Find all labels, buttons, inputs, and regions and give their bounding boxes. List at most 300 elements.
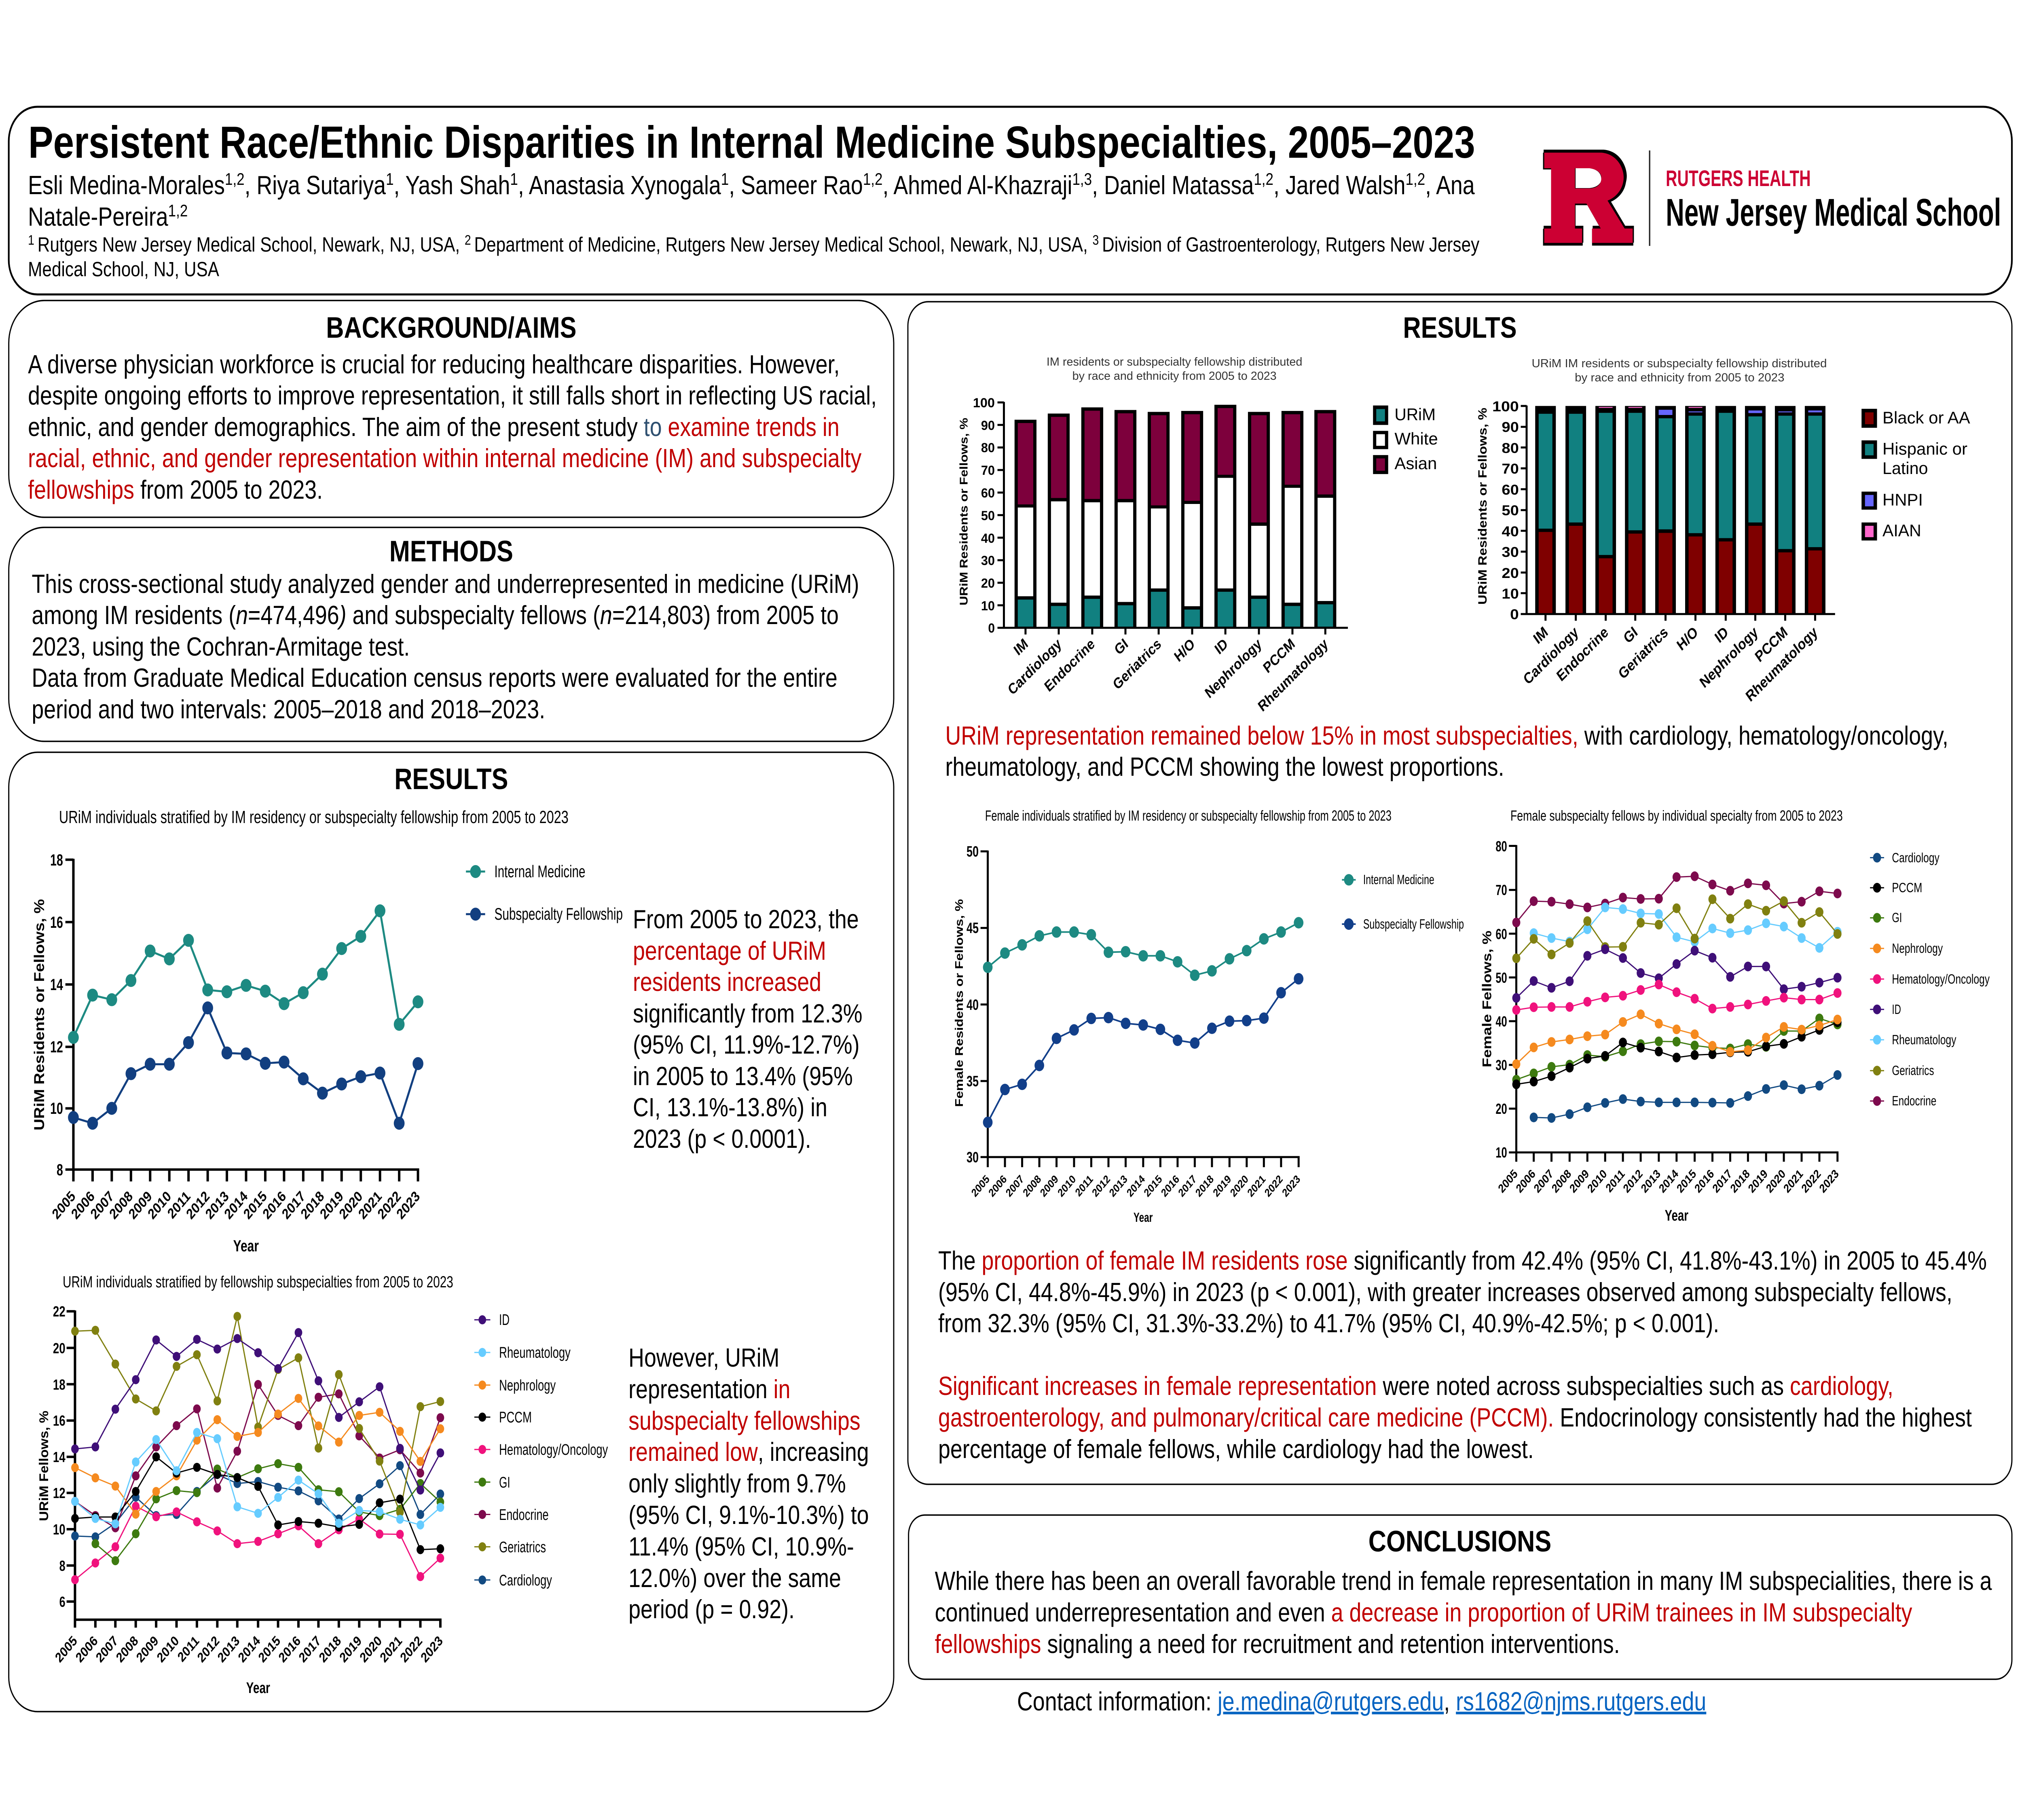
text: background	[28, 349, 877, 504]
legend labels: Hispanic or	[1882, 440, 1967, 459]
y axis labels: 10	[50, 1099, 63, 1117]
x axis labels: 2006	[73, 1633, 100, 1666]
x axis labels: 2016	[1159, 1173, 1181, 1200]
y axis labels	[50, 851, 63, 1179]
series: Cardiology	[1534, 1075, 1838, 1118]
authors: , Sameer Rao	[729, 170, 863, 200]
panel: methods	[9, 527, 894, 741]
x axis labels: 2018	[298, 1188, 327, 1223]
y axis title: URiM Residents or Fellows, %	[32, 899, 47, 1130]
affiliations: Division of Gastroenterology, Rutgers New Jersey	[1102, 233, 1480, 256]
legend labels: Subspecialty Fellowship	[495, 905, 623, 924]
bar: Rheumatology	[1314, 410, 1336, 628]
text: URiM residents finding: in 2005 to 13.4% (95%	[633, 1061, 853, 1091]
authors: 1	[386, 170, 394, 189]
series: Subspecialty Fellowship	[73, 1008, 418, 1123]
y axis labels: 12	[53, 1485, 66, 1502]
text: female representation findings: percentage of female fellows, while cardiology had the lowest.	[938, 1434, 1534, 1464]
text: female representation findings: Significant increases in female representation were noted across subspecialties such as cardiology,	[938, 1371, 1893, 1401]
text: subspecialty fellowship finding: subspecialty fellowships	[628, 1406, 861, 1435]
authors: , Jared Walsh	[1273, 170, 1406, 200]
bar: Nephrology	[1745, 406, 1766, 614]
title: Persistent Race/Ethnic Disparities in Internal Medicine Subspecialties, 2005–2023	[28, 117, 1475, 167]
series: Hematology/Oncology	[75, 1506, 440, 1580]
x axis labels: Geriatrics	[1110, 635, 1164, 693]
text: conclusions: continued underrepresentation and even a decrease in proportion of URiM trainees in IM subspecialty	[935, 1598, 1912, 1627]
x axis labels: 2017	[296, 1633, 323, 1666]
logo: Rutgers Health New Jersey Medical School: RUTGERS HEALTH	[1666, 165, 1810, 191]
x axis labels: 2012	[195, 1633, 222, 1666]
x axis labels: 2013	[1639, 1167, 1662, 1196]
y axis labels: 18	[53, 1377, 66, 1393]
series: Rheumatology	[1534, 908, 1838, 948]
bar: H/O	[1181, 411, 1203, 628]
bar: IM	[1535, 406, 1556, 614]
bar: Cardiology	[1048, 414, 1070, 628]
legend labels	[1363, 873, 1464, 932]
x axis labels: 2009	[1038, 1173, 1060, 1200]
x axis labels: 2010	[154, 1633, 182, 1666]
series: Nephrology	[1516, 1014, 1838, 1064]
text: URiM residents finding: From 2005 to 2023, the	[633, 904, 859, 934]
x axis labels: 2005	[53, 1633, 80, 1666]
y axis labels: 100	[1492, 398, 1519, 415]
authors: , Ahmed Al-Khazraji	[882, 170, 1072, 200]
panel: results right	[908, 302, 2012, 1484]
bar: ID	[1715, 406, 1736, 614]
y axis labels: 40	[1495, 1014, 1507, 1030]
y axis labels: 50	[981, 509, 995, 523]
y axis labels: 30	[981, 554, 995, 568]
text: female representation findings: gastroenterology, and pulmonary/critical care medicine (PCCM). Endocrinology consistently had the highest	[938, 1403, 1972, 1432]
x axis labels: 2005	[970, 1173, 992, 1200]
text: URiM residents finding: CI, 13.1%-13.8%) in	[633, 1092, 827, 1122]
x axis labels: 2009	[134, 1633, 161, 1666]
bar: Cardiology	[1565, 406, 1586, 614]
x axis labels: 2006	[987, 1173, 1009, 1200]
legend labels	[1394, 405, 1438, 473]
legend labels: Latino	[1882, 459, 1928, 478]
legend labels: Nephrology	[1892, 942, 1943, 956]
text: conclusions: fellowships signaling a need for recruitment and retention interventions.	[935, 1629, 1620, 1659]
chart title: URiM IM residents or subspecialty fellowship distributed	[1532, 357, 1827, 370]
x axis labels: 2020	[337, 1188, 365, 1223]
chart: IM residents and fellows by race and ethnicity	[958, 355, 1438, 715]
x axis labels: 2013	[203, 1188, 232, 1223]
x axis labels: 2014	[1656, 1166, 1681, 1196]
x axis title: Year	[246, 1679, 270, 1697]
x axis labels: 2006	[69, 1188, 97, 1223]
chart: female fellows by specialty	[1480, 808, 1990, 1224]
x axis labels: 2013	[1107, 1173, 1129, 1200]
x axis labels: 2021	[1246, 1173, 1268, 1200]
x axis labels: Rheumatology	[1743, 623, 1821, 705]
x axis labels: PCCM	[1752, 623, 1790, 666]
authors: 1,2	[863, 170, 882, 189]
legend labels: PCCM	[1892, 881, 1922, 895]
x axis labels: 2015	[241, 1188, 270, 1223]
series: Rheumatology	[75, 1433, 440, 1525]
text: methods: period and two intervals: 2005–2018 and 2018–2023.	[32, 694, 545, 724]
chart title: URiM individuals stratified by IM residency or subspecialty fellowship from 2005 to 2023	[59, 807, 569, 827]
y axis labels: 50	[1502, 502, 1519, 518]
y axis labels: 80	[1502, 440, 1519, 456]
x axis labels: 2012	[1621, 1167, 1645, 1196]
y axis labels: 60	[1502, 482, 1519, 498]
y axis labels: 90	[1502, 419, 1519, 435]
x axis labels: IM	[1531, 623, 1551, 648]
heading: results: RESULTS	[394, 763, 508, 796]
chart title: by race and ethnicity from 2005 to 2023	[1575, 371, 1785, 384]
chart title: IM residents or subspecialty fellowship distributed	[1047, 355, 1302, 368]
y axis labels: 30	[1495, 1057, 1507, 1074]
x axis labels: Endocrine	[1554, 623, 1611, 685]
y axis labels: 45	[967, 920, 979, 937]
authors: 1,2	[168, 201, 188, 220]
legend labels: Nephrology	[499, 1377, 556, 1394]
bar: IM	[1015, 420, 1036, 628]
x axis labels: GI	[1621, 623, 1640, 647]
bar: PCCM	[1282, 411, 1303, 628]
x axis labels	[1496, 1166, 1841, 1196]
x axis labels: PCCM	[1261, 635, 1298, 677]
x axis labels: 2020	[1764, 1167, 1788, 1196]
text: background: fellowships from 2005 to 2023.	[28, 475, 323, 504]
legend labels: AIAN	[1882, 521, 1921, 540]
x axis labels: 2019	[337, 1633, 364, 1666]
y axis labels: 90	[981, 419, 995, 433]
y axis labels: 60	[981, 486, 995, 501]
x axis labels: 2019	[1211, 1173, 1233, 1200]
x axis labels: Cardiology	[1005, 635, 1064, 698]
x axis labels: 2022	[398, 1633, 425, 1666]
x axis labels: 2021	[377, 1633, 404, 1666]
bar: GI	[1625, 406, 1646, 614]
authors: 1	[721, 170, 729, 189]
y axis labels: 6	[59, 1594, 66, 1610]
text: subspecialty fellowship finding	[628, 1343, 869, 1624]
series: Internal Medicine	[73, 911, 418, 1037]
legend labels	[1882, 408, 1970, 540]
y axis labels: 10	[981, 599, 995, 614]
text: conclusions: While there has been an overall favorable trend in female representation in many IM subspecialities, there is a	[935, 1566, 1992, 1596]
series: Geriatrics	[1516, 899, 1838, 958]
y axis labels: 20	[981, 576, 995, 591]
x axis labels: 2020	[1229, 1173, 1250, 1200]
text: URiM residents finding	[633, 904, 863, 1153]
x axis title: Year	[233, 1237, 259, 1255]
y axis labels: 70	[981, 463, 995, 478]
authors: 1,3	[1072, 170, 1092, 189]
bar: ID	[1214, 405, 1236, 628]
y axis title: URiM Fellows, %	[37, 1411, 51, 1521]
x axis labels: 2021	[1781, 1167, 1805, 1196]
y axis labels	[53, 1304, 66, 1610]
x axis labels: 2017	[279, 1188, 308, 1223]
legend labels	[495, 862, 623, 924]
x axis title: Year	[1134, 1211, 1153, 1225]
x axis labels: Nephrology	[1202, 635, 1264, 702]
legend labels: Hematology/Oncology	[499, 1441, 608, 1458]
authors: , Daniel Matassa	[1092, 170, 1254, 200]
legend labels: URiM	[1394, 405, 1436, 424]
text: background: despite ongoing efforts to improve representation, it still falls short in reflecting US racial,	[28, 381, 877, 410]
chart title: by race and ethnicity from 2005 to 2023	[1072, 369, 1277, 383]
legend labels: Geriatrics	[499, 1539, 546, 1556]
legend swatches	[1861, 409, 1877, 540]
chart: female by residency or fellowship	[953, 808, 1464, 1225]
legend labels: White	[1394, 430, 1438, 449]
affiliations: Rutgers New Jersey Medical School, Newark, NJ, USA,	[38, 233, 465, 256]
text: methods: 2023, using the Cochran-Armitage test.	[32, 632, 410, 661]
text: URiM residents finding: percentage of URiM	[633, 936, 826, 965]
series: Subspecialty Fellowship	[988, 979, 1299, 1122]
text: URiM representation finding: URiM representation remained below 15% in most subspecialties, with cardiology, hematology/oncology,	[945, 721, 1948, 750]
y axis labels: 16	[53, 1413, 66, 1429]
x axis labels: 2017	[1710, 1167, 1734, 1196]
series: Geriatrics	[75, 1316, 440, 1512]
text: female representation findings: (95% CI, 44.8%-45.9%) in 2023 (p < 0.001), with greater increases observed among subspecialty fellows,	[938, 1277, 1952, 1307]
authors: Esli Medina-Morales	[28, 170, 225, 200]
panel: header	[9, 107, 2012, 294]
authors: 1,2	[1254, 170, 1273, 189]
text: URiM residents finding: 2023 (p < 0.0001).	[633, 1124, 811, 1153]
series: Internal Medicine	[988, 923, 1299, 975]
bar: Endocrine	[1595, 406, 1616, 614]
x axis labels: 2009	[1567, 1167, 1591, 1196]
legend swatches	[1373, 406, 1388, 474]
y axis labels: 60	[1495, 926, 1507, 943]
y axis labels: 30	[967, 1149, 979, 1166]
text: female representation findings	[938, 1246, 1987, 1464]
series: Cardiology	[75, 1466, 440, 1537]
series: PCCM	[75, 1457, 440, 1550]
x axis labels: 2007	[1004, 1173, 1026, 1200]
text: subspecialty fellowship finding: only slightly from 9.7%	[628, 1469, 846, 1498]
series: PCCM	[1516, 1022, 1838, 1084]
legend labels: Black or AA	[1882, 408, 1970, 427]
x axis labels: 2008	[107, 1188, 135, 1223]
text: URiM residents finding: (95% CI, 11.9%-12.7%)	[633, 1030, 860, 1059]
chart title	[1532, 357, 1827, 384]
legend labels: Hematology/Oncology	[1892, 972, 1990, 987]
authors: , Anastasia Xynogala	[518, 170, 721, 200]
heading: background/aims: BACKGROUND/AIMS	[326, 311, 576, 344]
affiliations	[28, 233, 1480, 281]
chart title: Female individuals stratified by IM residency or subspecialty fellowship from 2005 to 2023	[985, 808, 1392, 824]
bar: Rheumatology	[1805, 406, 1825, 614]
x axis labels: GI	[1112, 635, 1131, 658]
text: background: racial, ethnic, and gender representation within internal medicine (IM) and subspecialty	[28, 443, 862, 473]
x axis labels: 2010	[1585, 1167, 1609, 1196]
authors	[28, 170, 1475, 231]
affiliations: 3	[1093, 233, 1102, 248]
y axis labels: 40	[1502, 523, 1519, 540]
series: Nephrology	[75, 1399, 440, 1514]
legend labels: HNPI	[1882, 491, 1923, 510]
series: Hematology/Oncology	[1516, 984, 1838, 1010]
x axis labels: 2007	[88, 1188, 116, 1223]
legend labels: GI	[499, 1474, 510, 1491]
y axis title: Female Fellows, %	[1480, 931, 1494, 1067]
x axis labels: 2023	[1280, 1173, 1303, 1200]
y axis labels: 22	[53, 1304, 66, 1320]
y axis labels: 80	[981, 441, 995, 455]
x axis labels: Geriatrics	[1616, 623, 1671, 683]
x axis labels: Nephrology	[1697, 623, 1761, 691]
x axis labels: 2021	[356, 1188, 385, 1223]
heading: conclusions: CONCLUSIONS	[1368, 1525, 1551, 1558]
x axis labels: 2018	[1194, 1173, 1216, 1200]
legend labels: Internal Medicine	[495, 862, 586, 881]
x axis labels: 2022	[1263, 1173, 1285, 1200]
text: background: A diverse physician workforce is crucial for reducing healthcare disparities. However,	[28, 349, 840, 379]
text: URiM representation finding	[945, 721, 1948, 781]
y axis labels	[1492, 398, 1519, 622]
heading: results: RESULTS	[1403, 311, 1517, 344]
x axis labels: 2016	[276, 1633, 303, 1666]
y axis labels: 14	[53, 1449, 66, 1466]
y axis labels: 0	[988, 621, 995, 636]
x axis labels: 2010	[1056, 1173, 1078, 1200]
legend labels: Endocrine	[1892, 1094, 1936, 1109]
x axis labels: ID	[1212, 635, 1231, 658]
x axis labels: 2015	[256, 1633, 283, 1666]
legend labels: Cardiology	[499, 1572, 552, 1589]
x axis labels: 2006	[1514, 1167, 1538, 1196]
x axis labels	[970, 1173, 1303, 1200]
y axis title: URiM Residents or Fellows, %	[1476, 408, 1489, 605]
y axis labels: 70	[1502, 461, 1519, 477]
series: Endocrine	[75, 1384, 440, 1528]
authors: 1,2	[225, 170, 245, 189]
x axis labels	[1521, 623, 1821, 705]
x axis labels: 2018	[317, 1633, 343, 1666]
heading: methods: METHODS	[389, 535, 513, 568]
authors: , Riya Sutariya	[245, 170, 386, 200]
legend labels: Geriatrics	[1892, 1064, 1934, 1078]
x axis labels: 2016	[1692, 1167, 1716, 1196]
x axis labels: Endocrine	[1042, 635, 1098, 695]
x axis labels: 2015	[1142, 1173, 1164, 1200]
x axis labels: 2012	[1090, 1173, 1113, 1200]
legend labels: Cardiology	[1892, 851, 1940, 866]
text: URiM representation finding: rheumatology, and PCCM showing the lowest proportions.	[945, 752, 1504, 781]
y axis labels: 50	[967, 843, 979, 860]
legend labels: Endocrine	[499, 1506, 549, 1524]
x axis labels: 2012	[184, 1188, 212, 1223]
x axis labels: 2023	[1817, 1167, 1841, 1196]
x axis labels: Rheumatology	[1255, 635, 1331, 715]
series: ID	[75, 1333, 440, 1490]
x axis labels: 2005	[50, 1188, 78, 1223]
y axis labels: 20	[53, 1340, 66, 1357]
y axis labels: 8	[59, 1558, 66, 1575]
x axis labels: 2023	[418, 1633, 445, 1666]
text: subspecialty fellowship finding: However, URiM	[628, 1343, 779, 1372]
legend labels: Rheumatology	[1892, 1033, 1956, 1048]
text: URiM residents finding: residents increased	[633, 967, 821, 997]
x axis labels: 2008	[114, 1633, 141, 1666]
x axis labels	[1005, 635, 1331, 715]
logo: Rutgers Health New Jersey Medical School	[1543, 150, 2001, 246]
x axis labels: 2022	[375, 1188, 404, 1223]
legend labels	[499, 1311, 608, 1589]
text: subspecialty fellowship finding: period (p = 0.92).	[628, 1594, 795, 1624]
x axis labels: 2013	[215, 1633, 242, 1666]
x axis labels: 2011	[1073, 1173, 1095, 1199]
x axis title: Year	[1665, 1207, 1688, 1224]
x axis labels: H/O	[1674, 623, 1701, 654]
legend labels: PCCM	[499, 1409, 532, 1426]
authors: , Yash Shah	[394, 170, 510, 200]
x axis labels: IM	[1011, 635, 1031, 659]
x axis labels: 2008	[1549, 1167, 1574, 1196]
x axis labels: 2018	[1728, 1167, 1752, 1196]
text: female representation findings: from 32.3% (95% CI, 31.3%-33.2%) to 41.7% (95% CI, 40.9%-42.5%; p < 0.001).	[938, 1308, 1719, 1338]
x axis labels: 2011	[175, 1633, 202, 1665]
x axis labels: 2022	[1799, 1167, 1823, 1196]
legend labels	[1892, 851, 1990, 1109]
series: GI	[95, 1464, 440, 1561]
x axis labels: 2023	[394, 1188, 423, 1223]
x axis labels: 2005	[1496, 1167, 1520, 1196]
y axis labels: 18	[50, 851, 63, 869]
x axis labels: 2017	[1176, 1173, 1199, 1200]
text: subspecialty fellowship finding: (95% CI, 9.1%-10.3%) to	[628, 1500, 869, 1530]
text: female representation findings: The proportion of female IM residents rose significantly from 42.4% (95% CI, 41.8%-43.1%) in 2005 to 45.4%	[938, 1246, 1987, 1275]
x axis labels: 2014	[236, 1633, 263, 1666]
x axis labels: 2011	[165, 1188, 193, 1222]
y axis labels: 40	[967, 997, 979, 1014]
x axis labels: 2014	[222, 1188, 251, 1223]
y axis labels: 35	[967, 1073, 979, 1090]
x axis labels: 2007	[1531, 1167, 1555, 1196]
x axis labels: 2015	[1675, 1167, 1698, 1196]
affiliations: 2	[465, 233, 474, 248]
legend labels: Asian	[1394, 454, 1437, 473]
text: subspecialty fellowship finding: representation in	[628, 1374, 791, 1404]
y axis labels	[1495, 838, 1507, 1161]
bar: Geriatrics	[1655, 406, 1676, 614]
y axis labels: 50	[1495, 970, 1507, 986]
y axis title: Female Residents or Fellows, %	[953, 899, 965, 1107]
x axis labels: 2014	[1125, 1173, 1147, 1200]
series: GI	[1516, 1018, 1838, 1080]
x axis labels: ID	[1712, 623, 1731, 646]
legend labels: GI	[1892, 911, 1902, 925]
text: conclusions	[935, 1566, 1992, 1659]
bar: Geriatrics	[1148, 412, 1170, 628]
y axis labels: 20	[1495, 1101, 1507, 1117]
y axis labels: 40	[981, 531, 995, 546]
text: subspecialty fellowship finding: 11.4% (95% CI, 10.9%-	[628, 1532, 854, 1561]
authors: Natale-Pereira	[28, 202, 168, 231]
panel: background and aims	[9, 301, 894, 517]
authors: , Ana	[1425, 170, 1475, 200]
y axis labels: 8	[57, 1161, 63, 1179]
x axis labels: 2008	[1021, 1173, 1043, 1200]
affiliations: Department of Medicine, Rutgers New Jersey Medical School, Newark, NJ, USA,	[474, 233, 1093, 256]
y axis labels: 10	[1495, 1145, 1507, 1161]
legend labels: Internal Medicine	[1363, 873, 1434, 887]
bar: H/O	[1685, 406, 1706, 614]
x axis labels	[53, 1633, 445, 1666]
chart title: Female subspecialty fellows by individual specialty from 2005 to 2023	[1510, 808, 1843, 824]
text: methods: among IM residents (n=474,496) and subspecialty fellows (n=214,803) from 2005 to	[32, 600, 839, 630]
y axis labels: 10	[1502, 586, 1519, 602]
y axis labels: 80	[1495, 838, 1507, 855]
